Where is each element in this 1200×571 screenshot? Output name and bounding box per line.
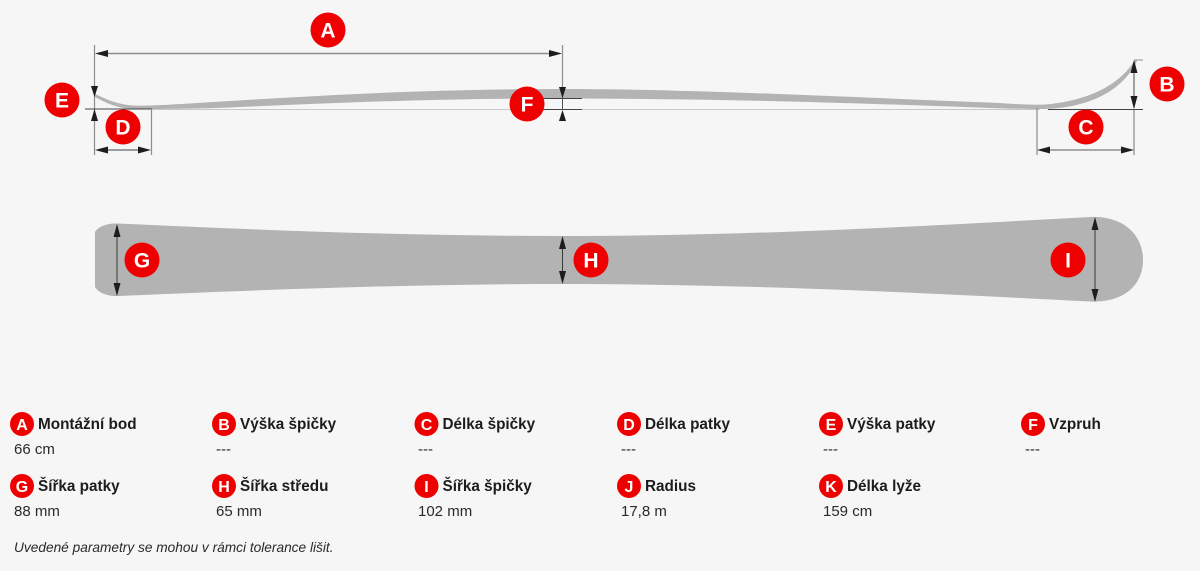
legend: D tail length [617, 412, 731, 458]
legend: J radius: J [625, 479, 633, 496]
badge G: G [134, 250, 150, 272]
legend: H waist width [212, 474, 328, 520]
dimension I: tip width [1050, 217, 1098, 302]
dimension A: mounting point [94, 12, 562, 155]
legend: H waist width: Šířka středu [240, 477, 328, 495]
legend: K ski length [819, 474, 921, 520]
legend: G tail width [10, 474, 120, 520]
legend: J radius [617, 474, 696, 520]
legend: F camber: F [1028, 417, 1038, 434]
legend: A mounting point: A [16, 417, 28, 434]
dimension D: tail length [95, 109, 152, 155]
legend: I tip width: Šířka špičky [442, 477, 532, 495]
legend: K ski length: K [825, 479, 837, 496]
badge A [310, 12, 346, 48]
legend: D tail length: Délka patky [645, 416, 731, 433]
legend: H waist width: 65 mm [216, 503, 262, 520]
legend: D tail length: --- [621, 441, 636, 458]
dimension H: waist width [559, 236, 608, 284]
badge F: F [521, 94, 534, 116]
legend: F camber: Vzpruh [1049, 416, 1101, 433]
legend: B tip height: B [218, 417, 230, 434]
legend: E tail height: --- [823, 441, 838, 458]
badge D: D [115, 116, 131, 140]
badge A: A [320, 20, 336, 42]
legend: E tail height: E [826, 417, 837, 434]
legend: B tip height [212, 412, 337, 458]
badge H: H [583, 250, 599, 272]
footnote: Uvedené parametry se mohou v rámci tolerance lišit. [14, 540, 334, 555]
legend: H waist width: H [218, 479, 230, 496]
legend: C tip length: --- [418, 441, 433, 458]
dimension E: tail height [44, 82, 152, 121]
legend: C tip length: Délka špičky [442, 416, 536, 433]
dimension C: tip length [1037, 108, 1134, 155]
legend: D tail length: D [623, 417, 635, 434]
legend: I tip width: I [424, 479, 429, 496]
legend: A mounting point: 66 cm [14, 441, 55, 458]
dimension B: tip height [1048, 60, 1184, 110]
legend: J radius: Radius [645, 478, 696, 495]
legend: F camber: --- [1025, 441, 1040, 458]
legend: J radius: 17,8 m [621, 503, 667, 520]
badge C: C [1078, 116, 1094, 140]
legend: I tip width [414, 474, 532, 520]
legend: E tail height: Výška patky [847, 416, 936, 433]
legend: K ski length: Délka lyže [847, 478, 921, 495]
legend: C tip length: C [421, 417, 433, 434]
badge I: I [1065, 250, 1071, 272]
dimension G: tail width [114, 224, 160, 296]
legend: K ski length: 159 cm [823, 503, 872, 520]
legend: I tip width: 102 mm [418, 503, 472, 520]
legend: E tail height [819, 412, 936, 458]
legend: A mounting point: Montážní bod [38, 416, 137, 433]
legend: B tip height: --- [216, 441, 231, 458]
legend: B tip height: Výška špičky [240, 416, 337, 433]
top view of the ski [95, 217, 1143, 302]
side profile of the ski [95, 60, 1137, 110]
badge E: E [55, 90, 69, 112]
legend: G tail width: 88 mm [14, 503, 60, 520]
legend: F camber [1021, 412, 1101, 458]
badge B: B [1159, 74, 1175, 96]
legend: G tail width: Šířka patky [38, 477, 120, 495]
legend: C tip length [414, 412, 536, 458]
legend: A mounting point [10, 412, 137, 458]
dimension F: camber [510, 86, 582, 122]
legend: G tail width: G [16, 479, 28, 496]
